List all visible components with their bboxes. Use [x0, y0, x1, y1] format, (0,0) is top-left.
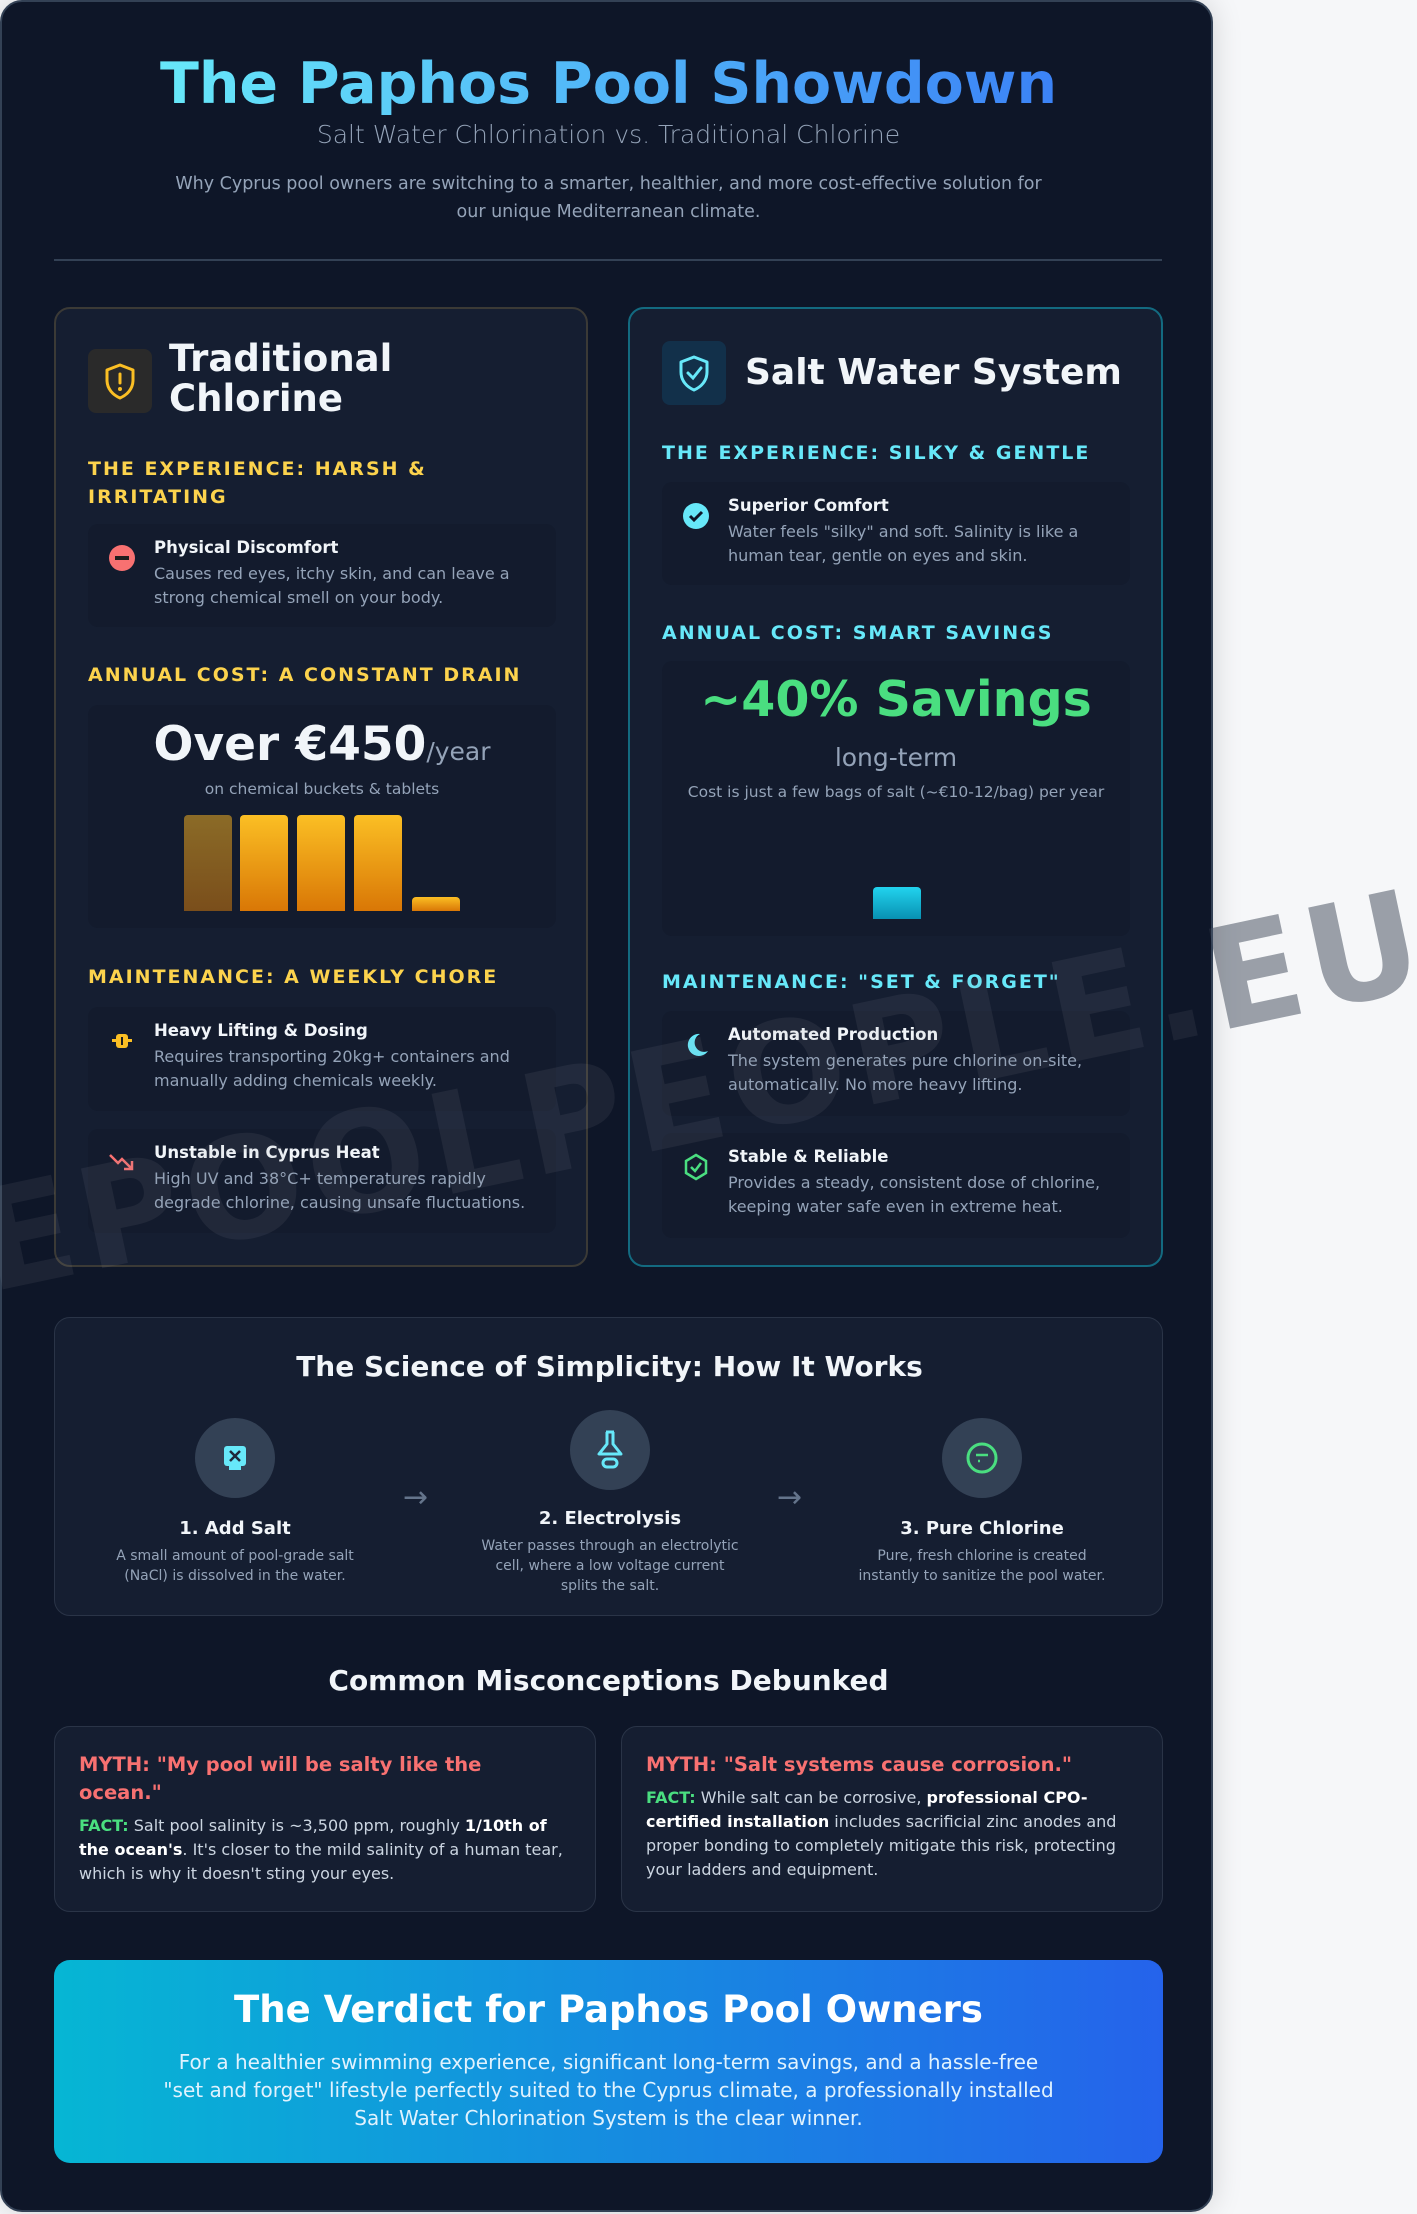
step 3: Pure, fresh chlorine is created instantly to sanitize the pool water. [859, 1548, 1105, 1584]
heading [169, 337, 392, 420]
label: experience: THE EXPERIENCE: SILKY & GENTLE [662, 442, 1090, 464]
subtitle: Salt Water Chlorination vs. Traditional Chlorine [317, 120, 900, 149]
item: heavy lifting: Requires transporting 20kg+ containers and manually adding chemicals weekly. [154, 1047, 510, 1090]
item: automated [662, 1011, 1130, 1116]
myth 1 [54, 1726, 596, 1912]
heading: Traditional [169, 337, 392, 380]
item: stable: Provides a steady, consistent dose of chlorine, keeping water safe even in extreme heat. [728, 1173, 1100, 1216]
intro text: Why Cyprus pool owners are switching to a smarter, healthier, and more cost-effective solution for our unique Mediterranean climate. [175, 174, 1042, 222]
step 2 [481, 1410, 739, 1594]
panel: traditional chlorine [54, 307, 588, 1267]
savings box: long-term [835, 743, 957, 772]
savings box: Cost is just a few bags of salt (~€10-12/bag) per year [688, 783, 1104, 801]
verdict banner [54, 1960, 1163, 2163]
item: heavy lifting: Heavy Lifting & Dosing [154, 1021, 368, 1040]
arrow 2: → [777, 1480, 802, 1515]
myth 1: MYTH: "My pool will be salty like the ocean." [79, 1753, 481, 1804]
verdict banner: For a healthier swimming experience, significant long-term savings, and a hassle-free [179, 2050, 1038, 2074]
icon: flask [570, 1410, 650, 1490]
icon: chlorine [942, 1418, 1022, 1498]
step 1: 1. Add Salt [179, 1518, 291, 1539]
step 3 [859, 1418, 1105, 1584]
icon: salt [195, 1418, 275, 1498]
myth 1: FACT: Salt pool salinity is ~3,500 ppm, roughly 1/10th of the ocean's. It's closer to the mild salinity of a human tear, which is why it doesn't sting your eyes. [79, 1816, 563, 1883]
label: maintenance: MAINTENANCE: "SET & FORGET" [662, 971, 1061, 993]
icon: check shield [662, 341, 726, 405]
step 2: 2. Electrolysis [539, 1508, 681, 1529]
item: stable: Stable & Reliable [728, 1147, 888, 1166]
heading: The Science of Simplicity: How It Works [296, 1350, 923, 1383]
arrow 1: → [403, 1480, 428, 1515]
cost box with bar chart: Over €450/year [153, 717, 491, 772]
item: physical discomfort: Physical Discomfort [154, 538, 338, 557]
myth 2 [621, 1726, 1163, 1912]
item: unstable in heat: Unstable in Cyprus Heat [154, 1143, 380, 1162]
item: superior comfort [662, 482, 1130, 585]
item: automated: Automated Production [728, 1025, 938, 1044]
step 1: A small amount of pool-grade salt (NaCl) is dissolved in the water. [116, 1548, 354, 1584]
item: heavy lifting [88, 1007, 556, 1111]
item: unstable in heat [88, 1129, 556, 1233]
label: cost: ANNUAL COST: A CONSTANT DRAIN [88, 664, 521, 686]
item: unstable in heat: High UV and 38°C+ temperatures rapidly degrade chlorine, causing unsafe fluctuations. [154, 1169, 525, 1212]
panel: salt water system [628, 307, 1163, 1267]
label: experience: THE EXPERIENCE: HARSH & IRRITATING [88, 458, 427, 508]
savings box: ~40% Savings [700, 671, 1092, 728]
item: superior comfort: Superior Comfort [728, 496, 889, 515]
heading: Chlorine [169, 377, 343, 420]
verdict banner: Salt Water Chlorination System is the clear winner. [354, 2106, 863, 2130]
panel: how it works [54, 1317, 1163, 1616]
label: maintenance: MAINTENANCE: A WEEKLY CHORE [88, 966, 498, 988]
item: superior comfort: Water feels "silky" and soft. Salinity is like a human tear, gentle on eyes and skin. [728, 522, 1078, 565]
verdict banner: "set and forget" lifestyle perfectly suited to the Cyprus climate, a professionally installed [163, 2078, 1054, 2102]
item: physical discomfort [88, 524, 556, 627]
heading: misconceptions: Common Misconceptions Debunked [328, 1664, 889, 1697]
cost box with bar chart [88, 705, 556, 928]
item: automated: The system generates pure chlorine on-site, automatically. No more heavy lifting. [728, 1051, 1082, 1094]
bar chart [184, 815, 460, 911]
item: stable [662, 1133, 1130, 1238]
cost box with bar chart: on chemical buckets & tablets [205, 780, 439, 798]
small bar [873, 887, 921, 919]
item: physical discomfort: Causes red eyes, itchy skin, and can leave a strong chemical smell on your body. [154, 564, 510, 607]
myth 2: MYTH: "Salt systems cause corrosion." [646, 1753, 1072, 1776]
heading: Salt Water System [745, 352, 1122, 393]
title: The Paphos Pool Showdown [160, 51, 1057, 117]
step 2: Water passes through an electrolytic cell, where a low voltage current splits the salt. [481, 1538, 739, 1594]
savings box [662, 661, 1130, 936]
step 1 [116, 1418, 354, 1584]
myth 2: FACT: While salt can be corrosive, professional CPO-certified installation includes sacrificial zinc anodes and proper bonding to completely mitigate this risk, protecting your ladders and equipment. [646, 1788, 1116, 1879]
icon: warning shield [88, 349, 152, 413]
verdict banner: The Verdict for Paphos Pool Owners [234, 1988, 983, 2031]
step 3: 3. Pure Chlorine [900, 1518, 1064, 1539]
label: cost: ANNUAL COST: SMART SAVINGS [662, 622, 1053, 644]
